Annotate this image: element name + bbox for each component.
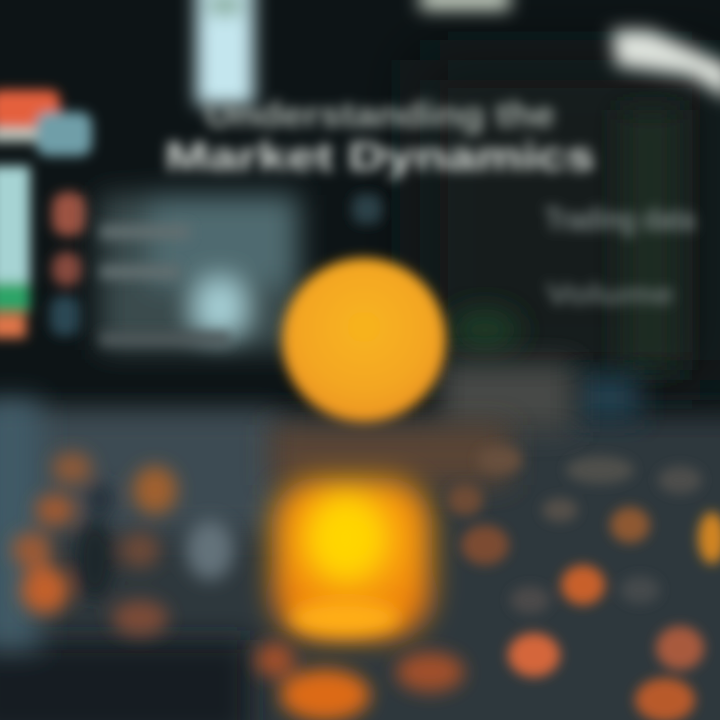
orange blobs left <box>12 452 234 636</box>
right text blocks <box>545 201 695 311</box>
brown haze around glow <box>270 425 510 485</box>
title: Understanding the <box>205 94 555 135</box>
right dark band <box>575 375 640 420</box>
title: Market Dynamics <box>165 135 595 179</box>
light column at top <box>196 0 254 105</box>
mid grey panel <box>440 362 575 432</box>
orange reflection at bottom <box>255 642 464 720</box>
title <box>165 94 595 179</box>
right text blocks: Volume <box>546 278 674 311</box>
top highlights <box>420 0 720 100</box>
orange blobs right <box>447 446 720 720</box>
green accent <box>449 308 521 352</box>
glowing orange block <box>272 478 432 638</box>
orange circle <box>282 258 446 422</box>
panel text lines <box>100 225 230 346</box>
central text panel <box>100 195 300 350</box>
left device graphic <box>0 90 92 338</box>
small icon under title <box>352 194 382 224</box>
